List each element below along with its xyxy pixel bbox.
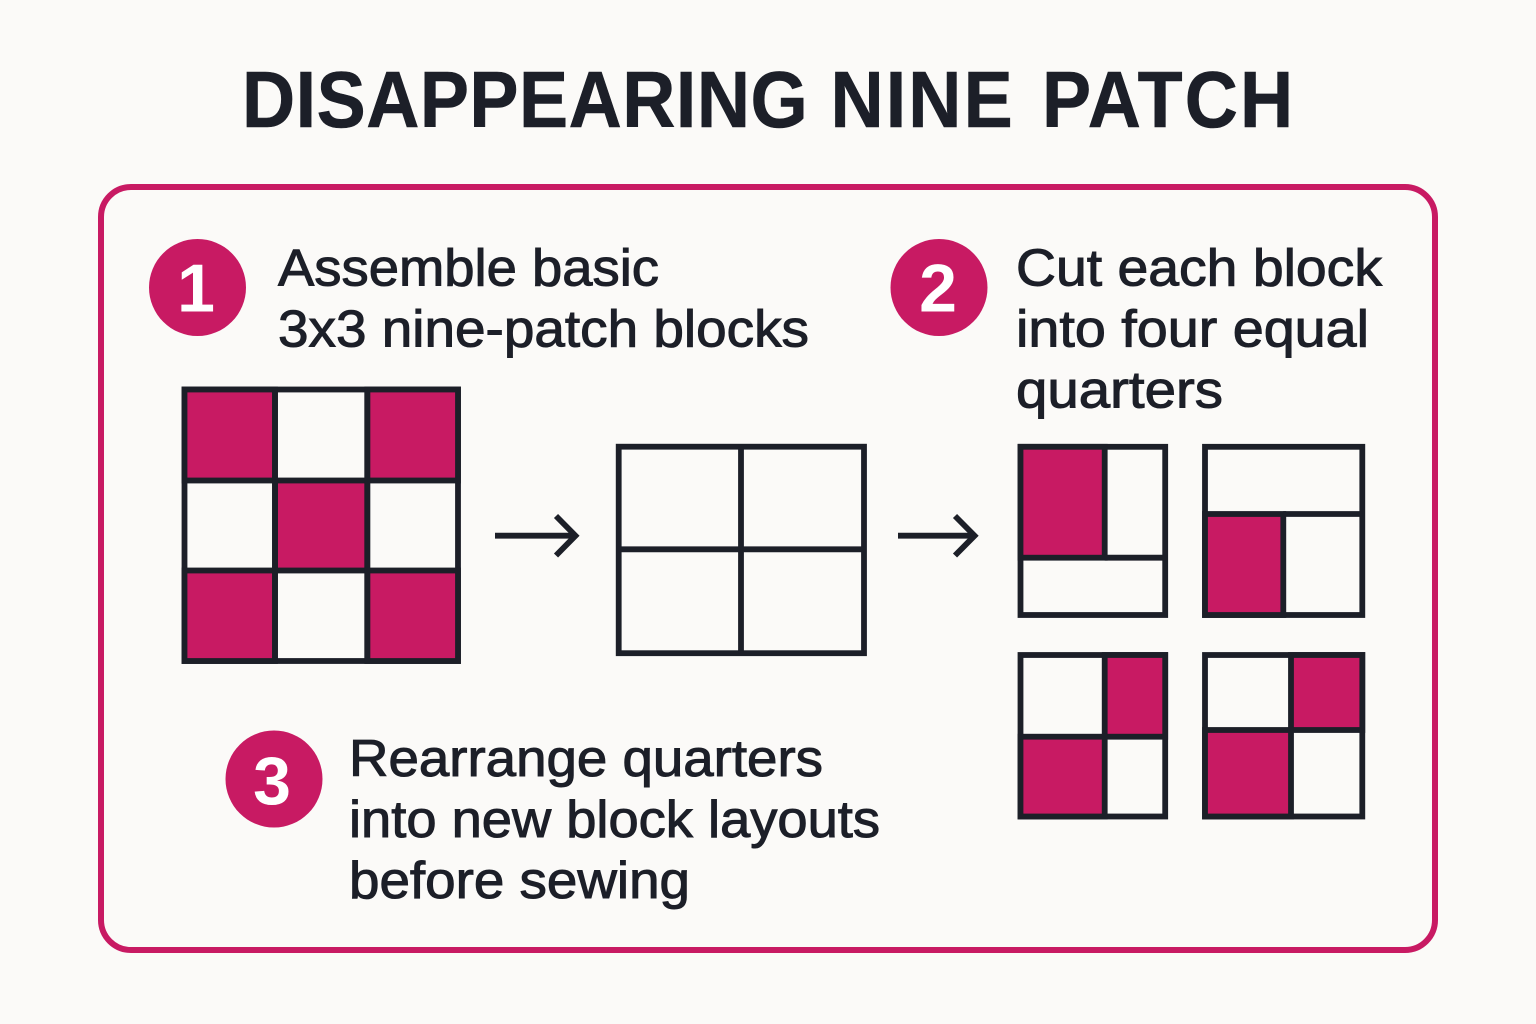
step 2 text: into four equal bbox=[1016, 300, 1369, 358]
nine-patch block bbox=[184, 390, 458, 661]
panel: main frame bbox=[101, 187, 1435, 950]
step 1 badge bbox=[149, 239, 246, 336]
title: PATCH bbox=[1042, 55, 1293, 145]
step 1 text: 3x3 nine-patch blocks bbox=[278, 300, 809, 358]
step 2 text bbox=[1016, 240, 1383, 420]
step 3 text: into new block layouts bbox=[349, 791, 880, 849]
step 2 badge: 2 bbox=[919, 250, 957, 326]
quarter bottom-left bbox=[1020, 655, 1165, 816]
title: NINE bbox=[830, 55, 1013, 145]
step 2 text: Cut each block bbox=[1016, 240, 1383, 298]
step 1 text: Assemble basic bbox=[278, 240, 659, 298]
step 3 text bbox=[349, 730, 880, 910]
block cut into four quarters bbox=[619, 447, 864, 653]
step 3 badge bbox=[226, 730, 322, 828]
quarter top-left bbox=[1020, 447, 1165, 615]
title: DISAPPEARING bbox=[242, 55, 808, 145]
step 3 text: before sewing bbox=[349, 852, 690, 910]
step 2 badge bbox=[890, 239, 988, 336]
step 1 badge: 1 bbox=[177, 250, 215, 326]
quarter bottom-right bbox=[1205, 655, 1362, 816]
arrow 2 bbox=[898, 516, 975, 556]
quarter top-right bbox=[1205, 447, 1362, 615]
step 2 text: quarters bbox=[1016, 362, 1223, 420]
arrow 1 bbox=[495, 516, 576, 556]
step 1 text bbox=[278, 240, 809, 358]
step 3 badge: 3 bbox=[253, 743, 291, 819]
step 3 text: Rearrange quarters bbox=[349, 730, 823, 788]
title bbox=[242, 55, 1293, 145]
